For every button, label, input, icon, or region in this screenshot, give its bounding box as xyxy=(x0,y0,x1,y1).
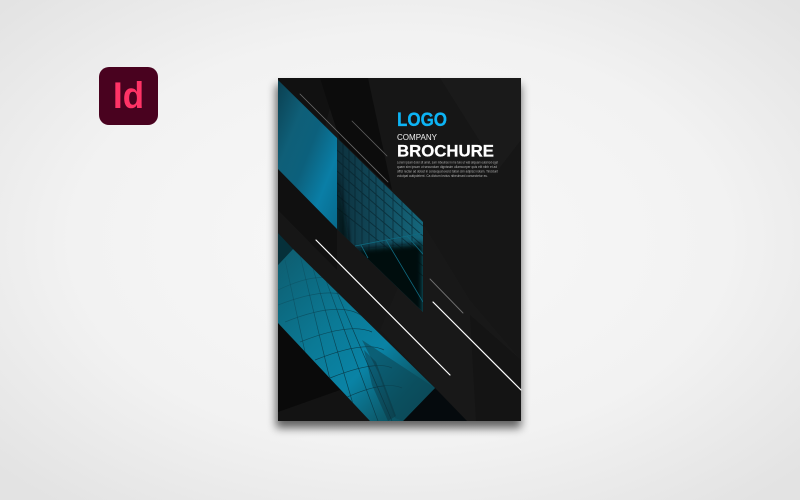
icon: InDesign logo xyxy=(99,67,158,125)
heading: brochure: BROCHURE xyxy=(397,142,494,160)
photo band: upper building xyxy=(278,80,423,320)
text block: body copy xyxy=(397,160,498,178)
panel: brochure cover xyxy=(278,78,521,421)
diagonal lines xyxy=(300,94,521,390)
brochure shadow xyxy=(276,85,521,428)
photo band: lower building xyxy=(278,249,435,421)
text block: body copy: volutpat autipdelent. Ca dictum lectus nibeuhsed consectetur eu. xyxy=(397,174,488,178)
icon: InDesign logo: Id xyxy=(113,75,144,116)
text block: body copy: Lorem ipsum dolor sit amet, sum nibeuhse in me ture ut wisi aliquam euismod eget xyxy=(397,160,498,164)
title: logo: LOGO xyxy=(397,110,447,131)
text block: body copy: quam sim ipsum ut secundum dignissim ullamcorper quis elit nibh et ad xyxy=(397,165,497,169)
dark lower part of upper building xyxy=(337,178,423,312)
text block: body copy: offici rectan ad dolcet in consequat exerci tation sim adipisci notam. Tincidunt xyxy=(397,170,498,174)
heading: company: COMPANY xyxy=(397,132,437,142)
